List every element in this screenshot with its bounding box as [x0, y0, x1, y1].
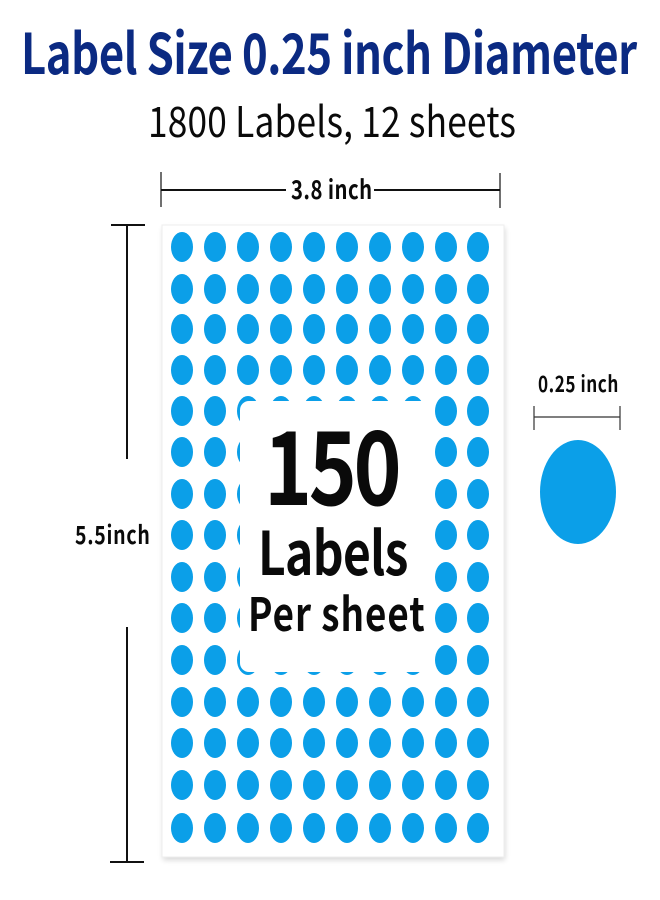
diameter dimension: 0.25 inch: 0.25 inch — [538, 366, 618, 399]
width dimension: 3.8 inch — [161, 169, 500, 208]
diameter dimension: 0.25 inch — [534, 366, 620, 430]
width dimension: 3.8 inch: 3.8 inch — [291, 169, 372, 207]
callout: 150 labels per sheet — [240, 387, 434, 672]
callout: 150 labels per sheet: 150 — [264, 387, 402, 535]
icon: enlarged blue label — [540, 440, 616, 544]
subtitle: 1800 Labels, 12 sheets — [148, 89, 516, 150]
label sheet — [162, 225, 505, 860]
height dimension: 5.5 inch — [75, 225, 150, 862]
grid of blue round labels — [171, 232, 489, 843]
title: Label Size 0.25 inch Diameter — [21, 10, 637, 91]
callout: 150 labels per sheet: Labels — [258, 505, 408, 593]
height dimension: 5.5 inch: 5.5inch — [75, 516, 150, 552]
callout: 150 labels per sheet: Per sheet — [248, 578, 425, 644]
